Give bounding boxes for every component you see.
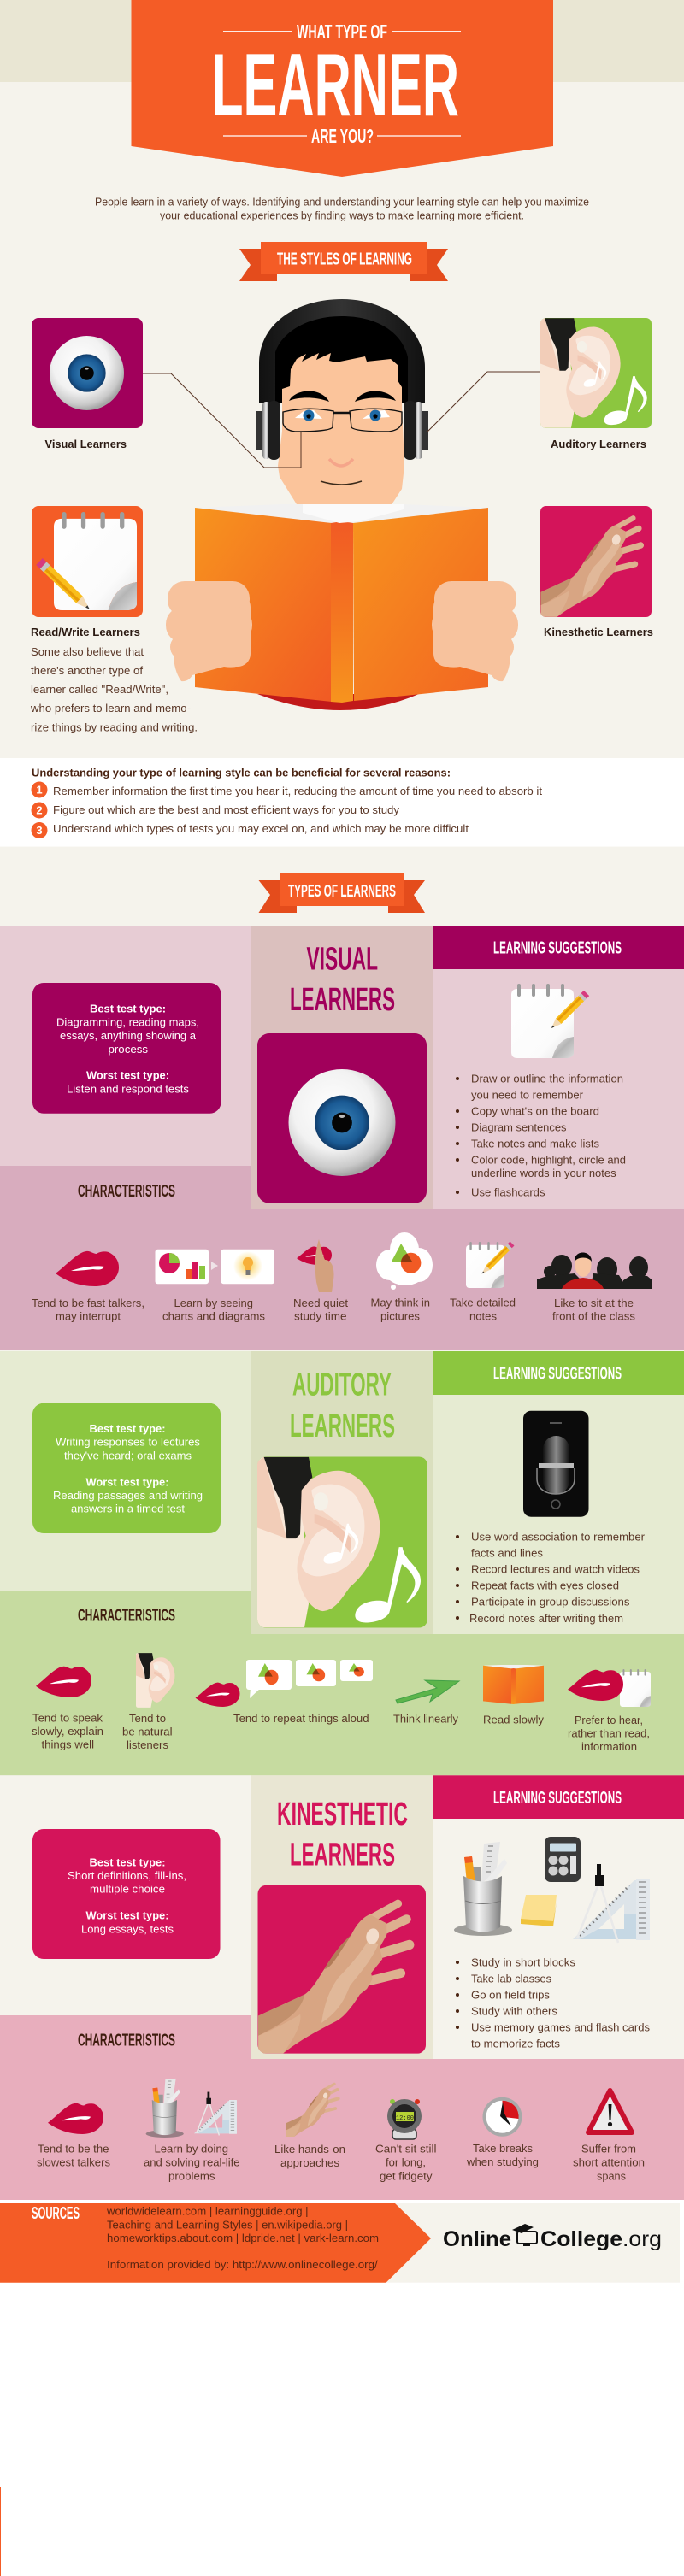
test type box: Worst test type: [86,1475,169,1489]
sticky notes [521,1895,557,1926]
suggestions list: facts and lines [471,1547,543,1559]
test type box: Worst test type: [86,1909,169,1921]
icon: phone with microphone [523,1411,588,1517]
suggestions list: you need to remember [471,1089,584,1101]
test type box: Best test type: [89,1856,166,1868]
characteristic: speak slowly: slowly, explain [32,1725,103,1738]
characteristic: short attention warning: Suffer from [581,2142,636,2155]
characteristic: front of the class: Like to sit at the [554,1297,634,1309]
reason 1: Remember information the first time you hear it, reducing the amount of time you need to absorb it [53,785,542,797]
nose [329,459,353,466]
ribbon: the styles of learning: THE STYLES OF LEARNING [277,250,412,268]
characteristic: charts and diagrams: Learn by seeing [174,1297,253,1309]
suggestions list: Record notes after writing them [469,1612,623,1625]
characteristic: natural listeners: Tend to [129,1712,166,1725]
suggestions list: Study in short blocks [471,1956,576,1969]
characteristic: fast talkers: may interrupt [56,1309,121,1323]
characteristic: natural listeners: listeners [127,1738,168,1751]
test type box [32,1829,221,1959]
panel: reasons [0,758,684,847]
reason 1: 1 [36,783,43,797]
stray orange edge line [0,2487,1,2576]
suggestions list: Take lab classes [471,1973,551,1985]
characteristic: short attention warning: spans [597,2169,626,2183]
characteristic: slowest talkers: slowest talkers [37,2155,111,2169]
suggestions list: Color code, highlight, circle and [471,1154,626,1166]
characteristic: fast talkers: Tend to be fast talkers, [32,1297,144,1309]
large ear panel [257,1456,428,1627]
section: kinesthetic learners [0,1775,684,2200]
panel: visual learners icon [32,318,143,428]
suggestions list [456,1530,646,1625]
large eye panel [257,1033,427,1203]
test type box: Diagramming, reading maps, [56,1015,199,1029]
label: kinesthetic learners: Kinesthetic Learners [544,626,653,638]
ribbon: the styles of learning [239,242,448,281]
suggestions list: Copy what's on the board [471,1104,599,1118]
suggestions list [456,1072,626,1198]
white gap and lower page [0,2200,684,2576]
test type box [32,983,221,1114]
sources list: Information provided by: http://www.onlinecollege.org/ [107,2258,378,2271]
characteristic: quiet study time [293,1239,348,1323]
learning suggestions header [433,1775,684,1819]
test type box [32,1403,221,1533]
heading: auditory learners [290,1367,395,1444]
characteristics heading: CHARACTERISTICS [78,1182,175,1201]
characteristic: detailed notes [450,1242,516,1323]
reasons heading: Understanding your type of learning style can be beneficial for several reasons: [32,766,451,779]
characteristic: speak slowly: Tend to speak [32,1711,103,1725]
characteristic: stopwatch fidgety [375,2099,437,2183]
characteristic: think in pictures [371,1232,433,1323]
characteristics heading: CHARACTERISTICS [78,2031,175,2050]
section: auditory learners [0,1351,684,1775]
intro text: People learn in a variety of ways. Identifying and understanding your learning style can help you maximize [95,195,589,209]
read/write paragraph: learner called "Read/Write", [31,683,168,696]
icon: notepad and pencil [511,984,589,1058]
test type box: Long essays, tests [81,1923,174,1935]
reason 2: Figure out which are the best and most efficient ways for you to study [53,803,400,816]
heading: kinesthetic learners: LEARNERS [290,1838,395,1873]
characteristic: hands-on approaches: Like hands-on [274,2143,345,2155]
mouth [321,481,362,485]
characteristic: prefer to hear: Prefer to hear, [575,1714,643,1726]
sources list: worldwidelearn.com | learningguide.org | [106,2205,309,2217]
left hand [166,581,252,681]
intro text [95,195,589,222]
top beige band [0,0,684,82]
characteristics heading: CHARACTERISTICS [78,1607,175,1626]
intro text: your educational experiences by finding ways to make learning more efficient. [160,209,524,222]
characteristic: take breaks [466,2097,539,2168]
reason 3: Understand which types of tests you may excel on, and which may be more difficult [53,822,469,835]
suggestions list: Diagram sentences [471,1121,567,1133]
characteristic: front of the class: front of the class [552,1309,635,1323]
characteristic: stopwatch fidgety: for long, [386,2155,426,2169]
reason 3: 3 [36,824,43,837]
characteristic: hands-on approaches [274,2084,345,2169]
suggestions list: Go on field trips [471,1988,551,2002]
test type box: multiple choice [90,1882,165,1896]
sources heading: SOURCES [32,2204,80,2223]
characteristic: slowest talkers [37,2103,111,2169]
left earcup [256,401,280,460]
characteristic: charts and diagrams: charts and diagrams [162,1309,266,1323]
suggestions list: Study with others [471,2005,558,2017]
title: are you: ARE YOU? [311,125,374,147]
read/write paragraph: who prefers to learn and memo- [30,702,191,715]
characteristic: natural listeners: be natural [122,1725,173,1738]
sources list [106,2205,379,2271]
logo: onlinecollege.org: .org [622,2227,662,2251]
sources list: homeworktips.about.com | ldpride.net | vark-learn.com [107,2232,379,2244]
read/write paragraph: Some also believe that [31,645,144,658]
characteristic: hands-on approaches: approaches [280,2156,339,2169]
heading: auditory learners: AUDITORY [292,1367,392,1403]
read/write paragraph [30,645,198,733]
ribbon: types of learners: TYPES OF LEARNERS [288,882,396,901]
book [195,504,488,703]
suggestions list: Repeat facts with eyes closed [471,1579,619,1591]
heading: visual learners: VISUAL [306,941,378,977]
suggestions list: Use memory games and flash cards [471,2020,650,2034]
headband [259,299,425,403]
characteristic: read slowly [483,1665,544,1726]
logo: onlinecollege.org: Online [443,2227,511,2251]
label: auditory learners: Auditory Learners [551,438,646,450]
test type box: Listen and respond tests [67,1082,189,1096]
label: read/write learners: Read/Write Learners [31,626,140,638]
icon: study tools [454,1837,650,1943]
test type box: Short definitions, fill-ins, [68,1869,186,1882]
section: visual learners [0,926,684,1350]
panel: read/write learners icon [32,506,143,617]
characteristic: fast talkers [32,1251,144,1323]
eyebrows [289,391,396,402]
connector: visual to glasses [143,373,301,468]
icon: graduation cap on monitor [512,2224,537,2246]
test type box: Best test type: [90,1002,166,1015]
characteristic: stopwatch fidgety: get fidgety [380,2169,433,2183]
compass and set square [573,1864,650,1943]
test type box: essays, anything showing a [60,1029,197,1042]
character: learner with headphones and book [166,299,518,710]
characteristic: stopwatch fidgety: Can't sit still [375,2142,437,2155]
read/write paragraph: rize things by reading and writing. [31,721,198,733]
reason 2: 2 [36,803,43,817]
test type box: answers in a timed test [71,1503,185,1514]
characteristic: prefer to hear: rather than read, [568,1726,650,1740]
characteristic: take breaks: when studying [466,2155,539,2168]
heading: visual learners: LEARNERS [290,982,395,1018]
test type box: they've heard; oral exams [64,1450,192,1461]
characteristic: detailed notes: Take detailed [450,1296,516,1309]
characteristic: quiet study time: study time [294,1309,347,1323]
characteristic: short attention warning: short attention [573,2155,645,2169]
calculator [545,1837,581,1882]
characteristic: learn by doing: problems [168,2169,215,2183]
shirt [257,694,419,710]
sources list: Teaching and Learning Styles | en.wikipedia.org | [107,2219,348,2231]
title: what type of: WHAT TYPE OF [297,21,387,43]
test type box: process [108,1043,148,1056]
characteristic: front of the class [537,1253,652,1323]
right earcup [404,401,428,460]
hair [275,316,408,403]
read/write paragraph: there's another type of [31,664,143,677]
test type box: Worst test type: [86,1068,169,1082]
characteristic: quiet study time: Need quiet [293,1297,348,1309]
characteristic: charts and diagrams [156,1250,274,1323]
title banner [132,0,553,177]
logo: onlinecollege.org: College [540,2227,622,2251]
learning suggestions header [433,1351,684,1395]
suggestions list: Record lectures and watch videos [471,1562,640,1576]
panel: auditory learners icon [540,318,652,428]
characteristic: prefer to hear: information [581,1740,637,1753]
characteristic: repeat things aloud [195,1660,373,1725]
large hand panel [258,1885,426,2054]
glasses [283,409,402,432]
collar [303,504,404,523]
eyes [295,410,390,421]
test type box: Best test type: [89,1422,166,1435]
characteristic: think linearly: Think linearly [393,1713,458,1725]
characteristic: stopwatch fidgety: 12:00 [396,2115,414,2122]
characteristic: take breaks: Take breaks [473,2142,533,2155]
characteristic: speak slowly [32,1667,103,1750]
suggestions list: Take notes and make lists [471,1137,599,1150]
suggestions list: Use flashcards [471,1186,545,1198]
heading: kinesthetic learners: KINESTHETIC [277,1797,408,1832]
heading: kinesthetic learners [277,1797,408,1873]
characteristic: learn by doing [144,2079,239,2183]
characteristic: speak slowly: things well [41,1738,94,1750]
characteristic: think in pictures: May think in [371,1296,430,1309]
face [278,353,404,509]
test type box: Reading passages and writing [53,1489,203,1502]
characteristic: detailed notes: notes [469,1309,497,1323]
learning suggestions header [433,926,684,969]
heading: auditory learners: LEARNERS [290,1409,395,1444]
heading: visual learners [290,941,395,1018]
panel: kinesthetic learners icon [540,506,652,617]
right hand [432,581,518,681]
logo: onlinecollege.org [443,2224,662,2251]
footer: sources [0,2203,680,2283]
suggestions list: Use word association to remember [471,1530,646,1544]
characteristic: learn by doing: and solving real-life [144,2155,239,2169]
suggestions list [456,1956,650,2050]
suggestions list: Participate in group discussions [471,1595,630,1609]
characteristic: natural listeners [122,1653,174,1751]
characteristic: read slowly: Read slowly [483,1713,544,1726]
connector: auditory to earcup [428,372,540,432]
characteristic: repeat things aloud: Tend to repeat things aloud [233,1712,369,1725]
suggestions list: Draw or outline the information [471,1072,623,1085]
characteristic: slowest talkers: Tend to be the [38,2142,109,2155]
characteristic: prefer to hear [568,1669,651,1753]
cup of pens [454,1842,512,1936]
title: learner: LEARNER [212,36,459,135]
ribbon: types of learners [258,873,425,913]
suggestions list: to memorize facts [471,2038,560,2050]
suggestions list: underline words in your notes [471,1167,616,1179]
test type box: Writing responses to lectures [56,1436,201,1448]
label: visual learners: Visual Learners [44,438,127,450]
characteristic: think linearly [393,1680,459,1725]
characteristic: think in pictures: pictures [380,1309,420,1323]
characteristic: learn by doing: Learn by doing [154,2142,228,2155]
characteristic: short attention warning [573,2091,645,2183]
